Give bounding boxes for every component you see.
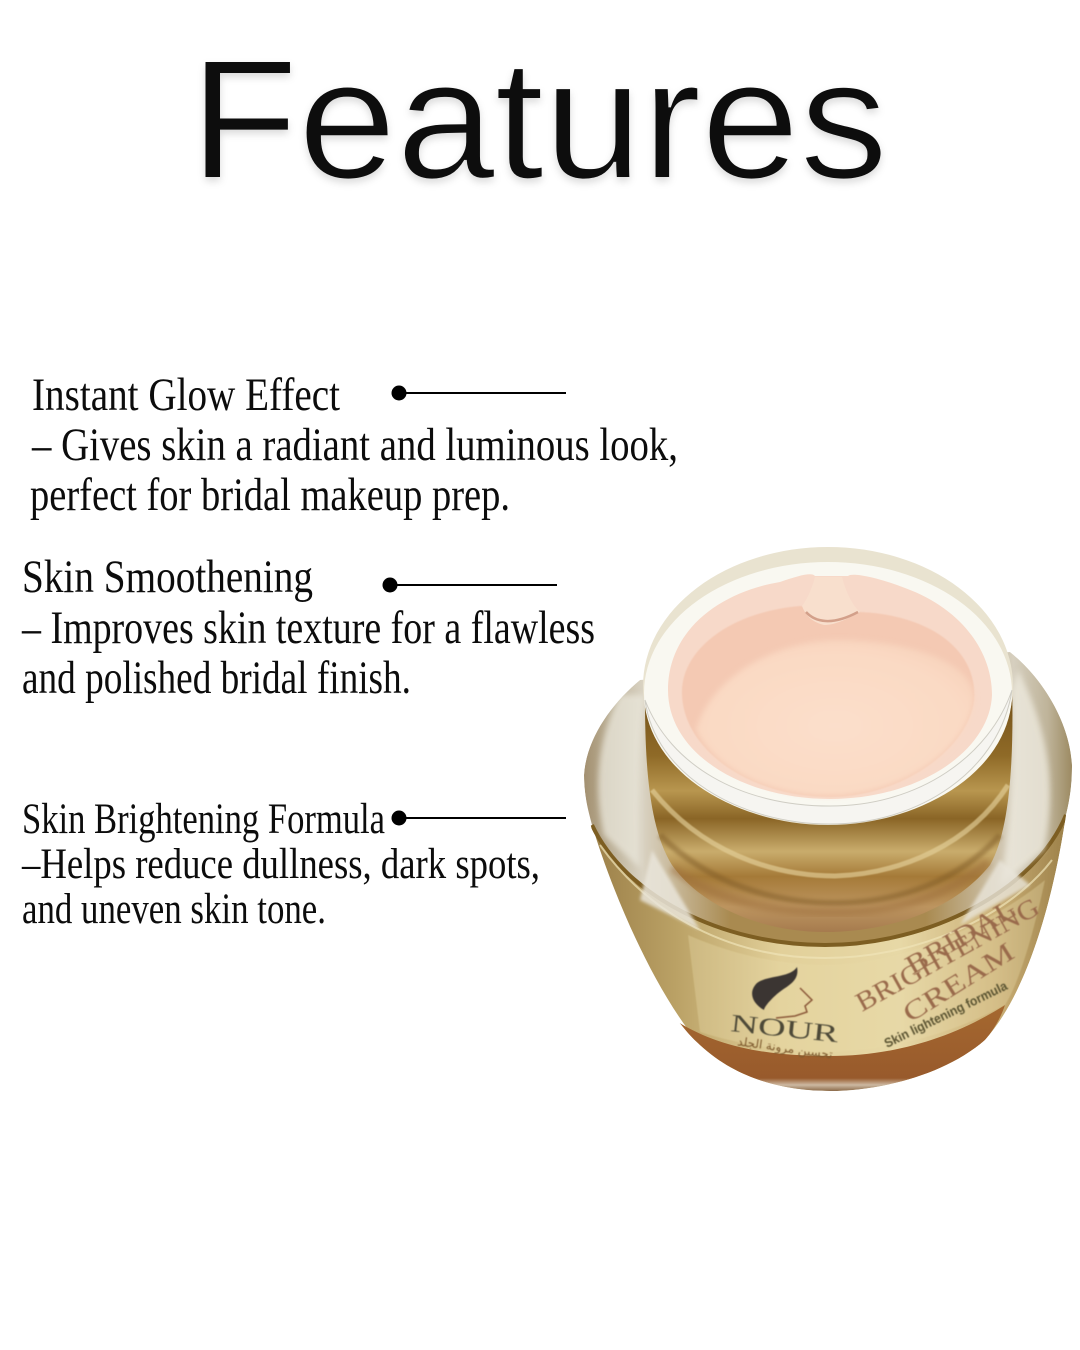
jar label [729, 892, 1044, 1063]
jar base tint [678, 1005, 1005, 1091]
white rim [643, 547, 1013, 825]
jar glass shoulder [584, 652, 1072, 945]
pointer: Skin Smoothening [382, 578, 557, 592]
product photo: cream jar [584, 547, 1072, 1091]
feature: Skin Smoothening [21, 551, 595, 704]
glass reflections [598, 695, 645, 868]
feature: Skin Brightening Formula: and uneven skin tone. [22, 886, 326, 933]
feature: Skin Brightening Formula: –Helps reduce dullness, dark spots, [21, 841, 540, 888]
arabic tagline: تحسين مرونة الجلد [736, 1034, 833, 1063]
feature: Skin Brightening Formula [21, 796, 540, 933]
feature: Instant Glow Effect: perfect for bridal makeup prep. [30, 469, 510, 521]
title: Features [190, 25, 888, 215]
cream surface [668, 574, 992, 799]
brand name: NOUR [729, 1010, 840, 1048]
jar lower body [592, 815, 1066, 1091]
label panel [688, 880, 1045, 1052]
product name: BRIGHTENING [850, 892, 1044, 1017]
brand logo [752, 967, 812, 1018]
feature: Skin Smoothening: Skin Smoothening [22, 551, 313, 603]
feature: Instant Glow Effect: – Gives skin a radiant and luminous look, [31, 419, 678, 471]
pointer: Instant Glow Effect [392, 386, 566, 400]
feature: Instant Glow Effect: Instant Glow Effect [32, 369, 340, 421]
product descriptor: Skin lightening formula [882, 978, 1010, 1051]
shoulder edge [592, 815, 1066, 945]
feature: Skin Brightening Formula: Skin Brightening Formula [22, 796, 385, 843]
product name: CREAM [897, 936, 1019, 1028]
feature: Skin Smoothening: and polished bridal finish. [22, 652, 411, 704]
pointer: Skin Brightening Formula [392, 810, 566, 826]
jar neck [645, 680, 1012, 932]
feature: Instant Glow Effect [30, 369, 678, 521]
product name: BRIDAL [900, 893, 1021, 980]
feature: Skin Smoothening: – Improves skin texture for a flawless [21, 602, 595, 654]
cream nozzle dip [802, 606, 860, 625]
